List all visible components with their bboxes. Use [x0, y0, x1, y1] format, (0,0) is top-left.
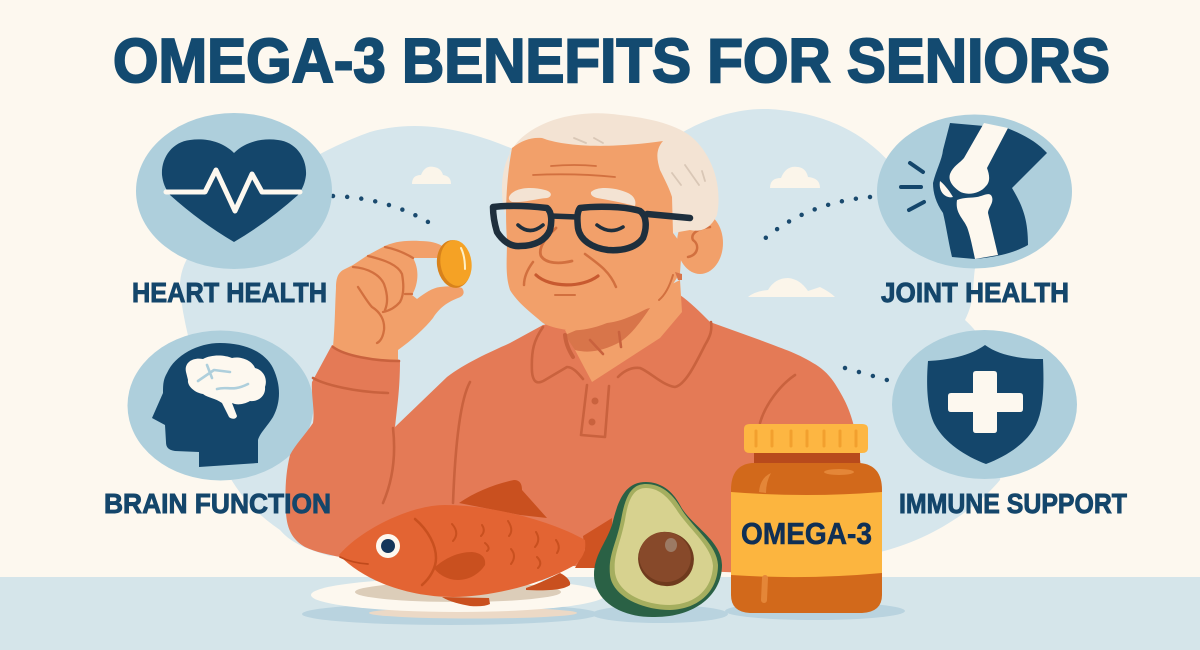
dotted connector: immune: [845, 368, 887, 380]
cuff line: [333, 347, 399, 361]
bottom fins: [526, 573, 570, 590]
table surface: [0, 577, 1200, 650]
background blue blobs: [180, 109, 1004, 556]
finger lines: [353, 247, 413, 343]
face: [506, 138, 682, 330]
eyebrows: [509, 188, 635, 206]
pectoral fin: [434, 552, 485, 580]
label: heart health: HEART HEALTH: [132, 277, 327, 308]
scales: [452, 521, 559, 568]
bottle label text: OMEGA-3: [741, 516, 872, 551]
omega-3 capsule: [434, 238, 475, 290]
mouth: [340, 557, 368, 564]
gill: [415, 519, 436, 585]
neck: [565, 280, 682, 382]
plate: [311, 578, 605, 618]
omega-3 bottle: [731, 424, 882, 613]
patch under ear: [675, 272, 682, 280]
senior man figure: [285, 113, 880, 578]
body: [339, 505, 585, 597]
icon: brain function: [128, 330, 314, 480]
ear: [677, 212, 723, 274]
icon: joint health: [877, 114, 1072, 268]
forehead and face lines: [524, 165, 673, 300]
shirt details: [313, 322, 795, 503]
clouds: [412, 167, 835, 297]
table shadows: [302, 602, 905, 625]
dotted connector: heart: [333, 196, 433, 225]
icon: immune support: [892, 330, 1077, 479]
avocado: [594, 482, 722, 617]
ear detail: [688, 227, 710, 257]
hair: [502, 113, 719, 233]
label: immune support: IMMUNE SUPPORT: [899, 488, 1127, 519]
dotted connector: joint: [762, 197, 870, 241]
label: joint health: JOINT HEALTH: [881, 277, 1069, 308]
dorsal fin: [459, 480, 547, 518]
title: OMEGA-3 BENEFITS FOR SENIORS: [113, 27, 1110, 96]
neck shadow: [565, 308, 650, 352]
hair strokes: [574, 138, 705, 185]
tail: [575, 518, 612, 568]
shirt buttons: [588, 398, 598, 426]
glasses: [493, 206, 690, 250]
hand: [333, 241, 464, 361]
eyes: [518, 225, 623, 231]
fish: [339, 480, 612, 606]
icon: heart health: [136, 113, 332, 269]
shirt: [285, 295, 880, 578]
eye: [376, 534, 400, 558]
label: brain function: BRAIN FUNCTION: [104, 488, 331, 519]
